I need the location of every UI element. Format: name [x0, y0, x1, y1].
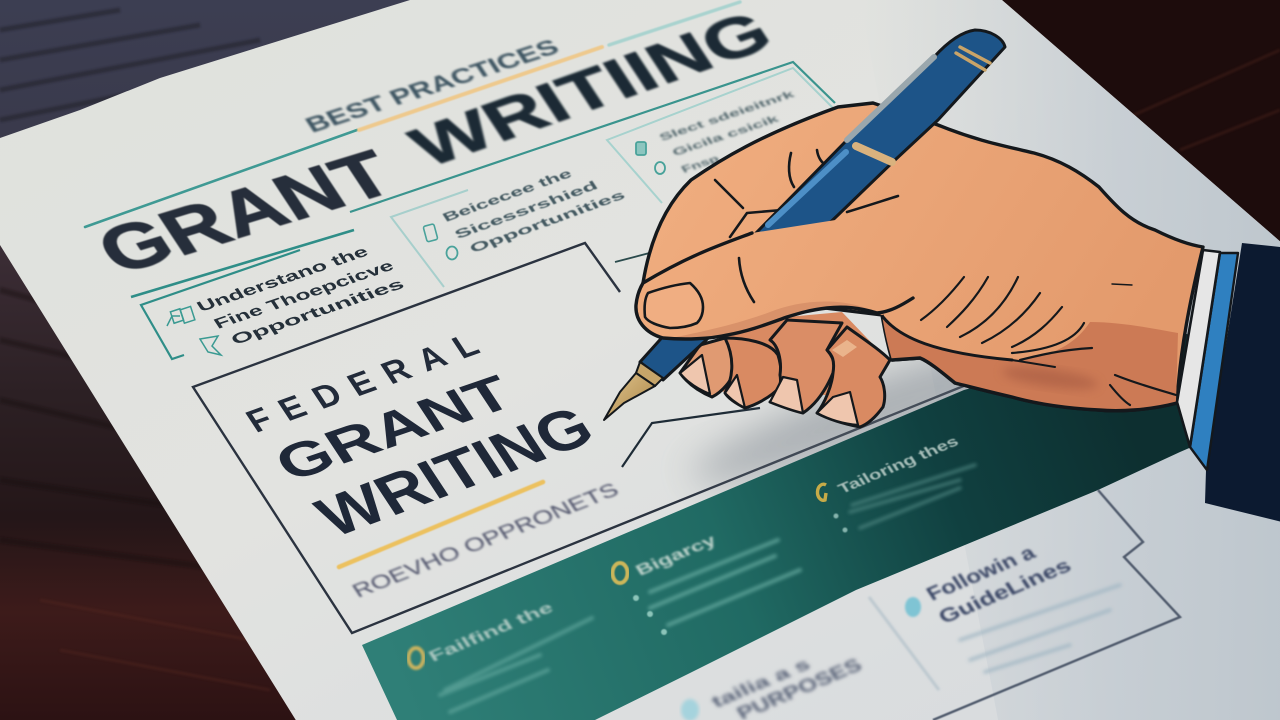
- finger four: [817, 327, 890, 427]
- panel: following guidelines: [869, 490, 1180, 720]
- pen clip: [847, 57, 934, 140]
- icon: check boxes: [636, 142, 665, 174]
- icon: blue shield: [905, 597, 921, 617]
- soft shadow below the hand: [688, 356, 969, 496]
- panel text: Fnsp: [679, 153, 722, 176]
- darker lower palm: [882, 316, 1178, 411]
- thumb crease: [739, 258, 754, 302]
- finger backing: [686, 312, 888, 400]
- tip: tailoring the: [817, 433, 975, 532]
- white shirt cuff: [1177, 250, 1220, 447]
- header rule: teal, gold and pale teal: [85, 2, 740, 227]
- panel text: [657, 89, 797, 176]
- panel text: Beicecee the: [439, 166, 575, 225]
- icon: ring: [446, 246, 458, 260]
- heading: writing: WRITING: [304, 394, 605, 549]
- finger three: [770, 320, 842, 413]
- panel heading: [923, 542, 1076, 628]
- subheading: ROEVHO OPPRONETS: [349, 479, 623, 602]
- tip heading: Failfind the: [426, 600, 557, 665]
- pen body: [640, 30, 1005, 380]
- panel text: Opportunities: [466, 188, 628, 256]
- panel text: [196, 249, 404, 343]
- panel text: Gicila csicik: [670, 113, 781, 159]
- pen nib: [604, 373, 655, 420]
- jacket sleeve: [1205, 243, 1280, 524]
- pen highlight: [768, 152, 846, 225]
- tip lines: [850, 465, 975, 528]
- gold underline: [339, 482, 543, 567]
- panel heading: GuideLines: [935, 555, 1076, 628]
- main title: grant: GRANT: [83, 137, 407, 288]
- panel text: Understano the: [194, 244, 372, 315]
- palm shadow: [1001, 362, 1099, 394]
- tip: bigarcy: [612, 532, 800, 635]
- bullets: [633, 595, 667, 635]
- finger one: [680, 338, 735, 397]
- finger highlight: [832, 340, 857, 357]
- icon: gold ring: [817, 484, 826, 500]
- panel heading: tailia a s: [708, 655, 814, 711]
- main title: writing: WRITIING: [398, 0, 784, 179]
- finger two: [725, 338, 781, 408]
- tip heading: Tailoring thes: [835, 433, 962, 497]
- pen centre ring: [856, 146, 892, 162]
- panel text: Opportunities: [228, 276, 408, 348]
- panel lines: [960, 585, 1120, 672]
- panel: research the opportunities: [350, 62, 835, 287]
- panel: green band with three tips: [362, 334, 1189, 720]
- pen: [604, 30, 1005, 420]
- panel text: [442, 171, 625, 252]
- finger creases: [715, 150, 898, 237]
- curled fingers: [680, 312, 890, 427]
- icon: blue circle: [681, 699, 699, 720]
- icon: clipboard: [423, 224, 438, 242]
- panel heading: [708, 655, 866, 720]
- thumb nail: [645, 283, 703, 328]
- panel: understand the opportunities: [131, 230, 408, 359]
- panel: federal grant writing: [193, 243, 971, 633]
- knuckle and palm crease lines: [883, 277, 1176, 405]
- tip lines: [440, 618, 592, 712]
- hand lower outline: [892, 358, 1177, 411]
- icon: gold ring: [612, 563, 628, 583]
- blue shirt cuff: [1190, 253, 1238, 470]
- heading: federal: FEDERAL: [239, 327, 486, 440]
- panel heading: Followin a: [923, 542, 1041, 605]
- thumb fill: [636, 210, 925, 339]
- panel text: Sicessrshied: [451, 178, 601, 242]
- back of hand and wrist: [643, 103, 1203, 411]
- pen cap bands: [956, 47, 990, 70]
- thumb outline: [636, 233, 913, 339]
- icon: gold ring: [408, 648, 424, 668]
- panel: select the opportunities: [607, 68, 835, 203]
- hand holding the pen: [604, 30, 1280, 524]
- shirt and jacket cuff: [1177, 243, 1280, 524]
- fingernails: [680, 355, 858, 425]
- icon: funnel: [200, 336, 221, 355]
- eyebrow heading: best practices: BEST PRACTICES: [300, 34, 564, 137]
- tip: failfind the: [408, 600, 592, 712]
- heading: grant: GRANT: [265, 366, 524, 492]
- thumb: [636, 210, 925, 339]
- icon: document: [167, 306, 195, 326]
- panel text: Slect sdeieitnrk: [657, 89, 797, 144]
- panel text: Fine Thoepcicve: [211, 258, 398, 332]
- panel outline: [622, 408, 760, 467]
- thumb underside shading: [672, 301, 882, 339]
- tip lines: [650, 540, 800, 625]
- bullets: [834, 514, 848, 532]
- tip heading: Bigarcy: [633, 532, 720, 579]
- pen nib collar: [636, 362, 663, 386]
- panel: tailor purposes: [681, 655, 866, 720]
